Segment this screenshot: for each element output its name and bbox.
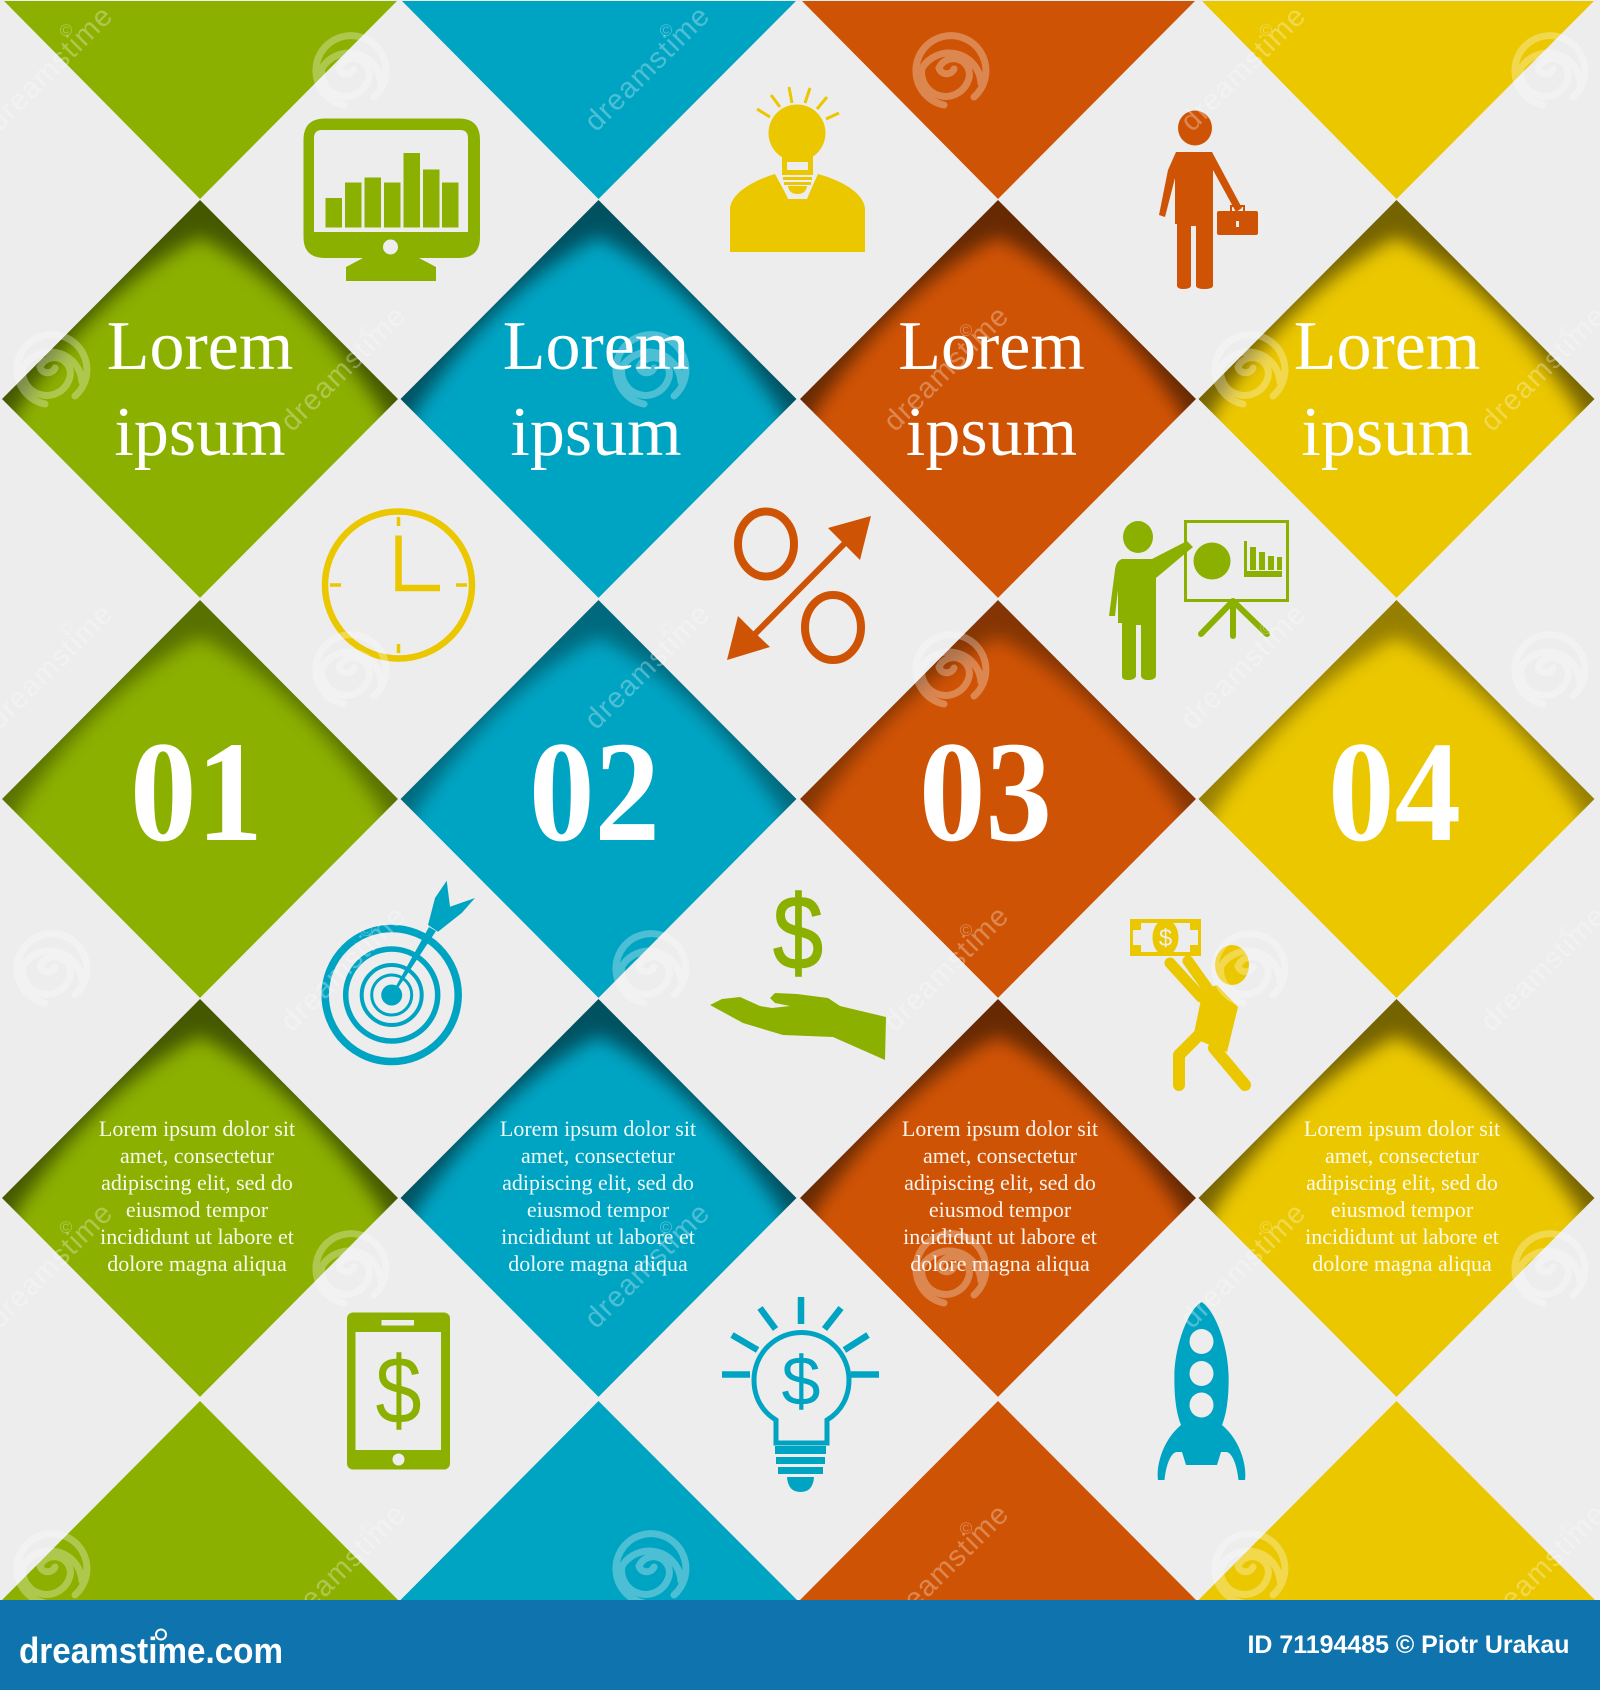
- icon: idea bulb person: [730, 87, 865, 252]
- heading: green Lorem ipsum: ipsum: [114, 394, 286, 471]
- paragraph: blue: Lorem ipsum dolor sit: [500, 1116, 696, 1141]
- footer credit: ID 71194485 © Piotr Urakau: [1248, 1631, 1570, 1659]
- paragraph: green: dolore magna aliqua: [107, 1251, 287, 1276]
- paragraph: yellow: dolore magna aliqua: [1312, 1251, 1492, 1276]
- footer logo: dreamstime.com: [19, 1630, 283, 1671]
- watermark text: dreamstime: [579, 0, 717, 138]
- number 04: 04: [1328, 713, 1461, 872]
- panel: bottom row triangles: [2, 1401, 1595, 1600]
- icon: clock: [325, 512, 472, 658]
- paragraph: blue: eiusmod tempor: [527, 1197, 670, 1222]
- panel: green text diamond: [2, 999, 398, 1397]
- paragraph: orange: adipiscing elit, sed do: [904, 1170, 1096, 1195]
- watermark text: ©: [960, 921, 973, 940]
- watermark text: ©: [960, 1519, 973, 1538]
- watermark text: ©: [60, 21, 73, 40]
- watermark text: dreamstime: [275, 300, 413, 438]
- panel: blue number diamond: [400, 600, 796, 998]
- heading: yellow Lorem ipsum: ipsum: [1301, 394, 1473, 471]
- paragraph: orange: amet, consectetur: [923, 1143, 1078, 1168]
- watermark text: ©: [660, 21, 673, 40]
- panel: blue title diamond: [400, 200, 796, 598]
- panel: orange title diamond: [800, 200, 1196, 598]
- icon: percent arrow: [727, 512, 871, 660]
- watermark text: ©: [60, 1218, 73, 1237]
- watermark text: ©: [360, 921, 373, 940]
- paragraph: blue: dolore magna aliqua: [508, 1251, 688, 1276]
- panel: green number diamond: [2, 600, 398, 998]
- icon: businessman with briefcase: [1159, 110, 1258, 289]
- paragraph: blue: adipiscing elit, sed do: [502, 1170, 694, 1195]
- footer band: [0, 1600, 1600, 1690]
- watermark text: ©: [1260, 619, 1273, 638]
- watermark text: ©: [1560, 321, 1573, 340]
- paragraph: blue: amet, consectetur: [521, 1143, 676, 1168]
- heading: orange Lorem ipsum: ipsum: [906, 394, 1077, 471]
- icon: phone with dollar: $: [376, 1337, 422, 1444]
- watermark text: dreamstime: [1175, 1197, 1313, 1335]
- paragraph: yellow: eiusmod tempor: [1331, 1197, 1474, 1222]
- icon: phone with dollar: [347, 1312, 450, 1470]
- watermark text: dreamstime: [579, 1197, 717, 1335]
- number 02: 02: [529, 713, 660, 872]
- watermark text: ©: [1260, 1218, 1273, 1237]
- icon: rocket: [1158, 1302, 1245, 1480]
- icon: hand with dollar: $: [773, 875, 823, 992]
- paragraph: green: adipiscing elit, sed do: [101, 1170, 293, 1195]
- icon: man lifting money: [1130, 919, 1249, 1085]
- watermark text: ©: [1560, 1519, 1573, 1538]
- watermark text: ©: [1260, 21, 1273, 40]
- watermark text: dreamstime: [878, 900, 1016, 1038]
- paragraph: green: Lorem ipsum dolor sit: [99, 1116, 295, 1141]
- paragraph: orange: Lorem ipsum dolor sit: [902, 1116, 1098, 1141]
- paragraph: yellow: Lorem ipsum dolor sit: [1304, 1116, 1500, 1141]
- panel: orange number diamond: [800, 600, 1196, 998]
- paragraph: yellow: incididunt ut labore et: [1305, 1224, 1499, 1249]
- watermark text: dreamstime: [275, 900, 413, 1038]
- icon: light bulb with dollar: $: [782, 1342, 820, 1420]
- paragraph: yellow: amet, consectetur: [1325, 1143, 1480, 1168]
- panel: green title diamond: [2, 200, 398, 598]
- watermark text: ©: [60, 619, 73, 638]
- number 01: 01: [130, 713, 263, 872]
- watermark text: dreamstime: [579, 598, 717, 736]
- icon: light bulb with dollar: [722, 1297, 879, 1492]
- watermark text: ©: [360, 1519, 373, 1538]
- heading: orange Lorem ipsum: Lorem: [898, 308, 1085, 385]
- heading: yellow Lorem ipsum: Lorem: [1294, 308, 1480, 385]
- watermark text: dreamstime: [1175, 0, 1313, 138]
- panel: blue text diamond: [400, 999, 796, 1397]
- paragraph: green: incididunt ut labore et: [100, 1224, 294, 1249]
- watermark text: dreamstime: [275, 1498, 413, 1636]
- paragraph: orange: eiusmod tempor: [929, 1197, 1072, 1222]
- heading: blue Lorem ipsum: Lorem: [503, 308, 689, 385]
- paragraph: orange: incididunt ut labore et: [903, 1224, 1097, 1249]
- panel: yellow text diamond: [1198, 999, 1594, 1397]
- watermark text: dreamstime: [1175, 598, 1313, 736]
- heading: blue Lorem ipsum: ipsum: [510, 394, 682, 471]
- paragraph: yellow: adipiscing elit, sed do: [1306, 1170, 1498, 1195]
- panel: top row triangles: [4, 1, 1594, 199]
- watermark text: dreamstime: [878, 1498, 1016, 1636]
- paragraph: green: amet, consectetur: [120, 1143, 275, 1168]
- watermark text: ©: [660, 619, 673, 638]
- heading: green Lorem ipsum: Lorem: [107, 308, 293, 385]
- paragraph: blue: incididunt ut labore et: [501, 1224, 695, 1249]
- icon: target with dart: [325, 881, 475, 1062]
- icon: presenter with board: [1109, 521, 1288, 680]
- watermark text: ©: [660, 1218, 673, 1237]
- panel: orange text diamond: [800, 999, 1196, 1397]
- watermark text: ©: [1560, 921, 1573, 940]
- watermark text: ©: [360, 321, 373, 340]
- paragraph: green: eiusmod tempor: [126, 1197, 269, 1222]
- paragraph: orange: dolore magna aliqua: [910, 1251, 1090, 1276]
- watermark text: ©: [960, 321, 973, 340]
- number 03: 03: [919, 713, 1052, 872]
- icon: man lifting money: $: [1159, 925, 1172, 952]
- icon: hand with dollar: [710, 875, 886, 1060]
- icon: monitor with bar chart: [304, 118, 480, 281]
- watermark text: dreamstime: [878, 300, 1016, 438]
- panel: yellow number diamond: [1198, 600, 1594, 998]
- panel: yellow title diamond: [1198, 200, 1594, 598]
